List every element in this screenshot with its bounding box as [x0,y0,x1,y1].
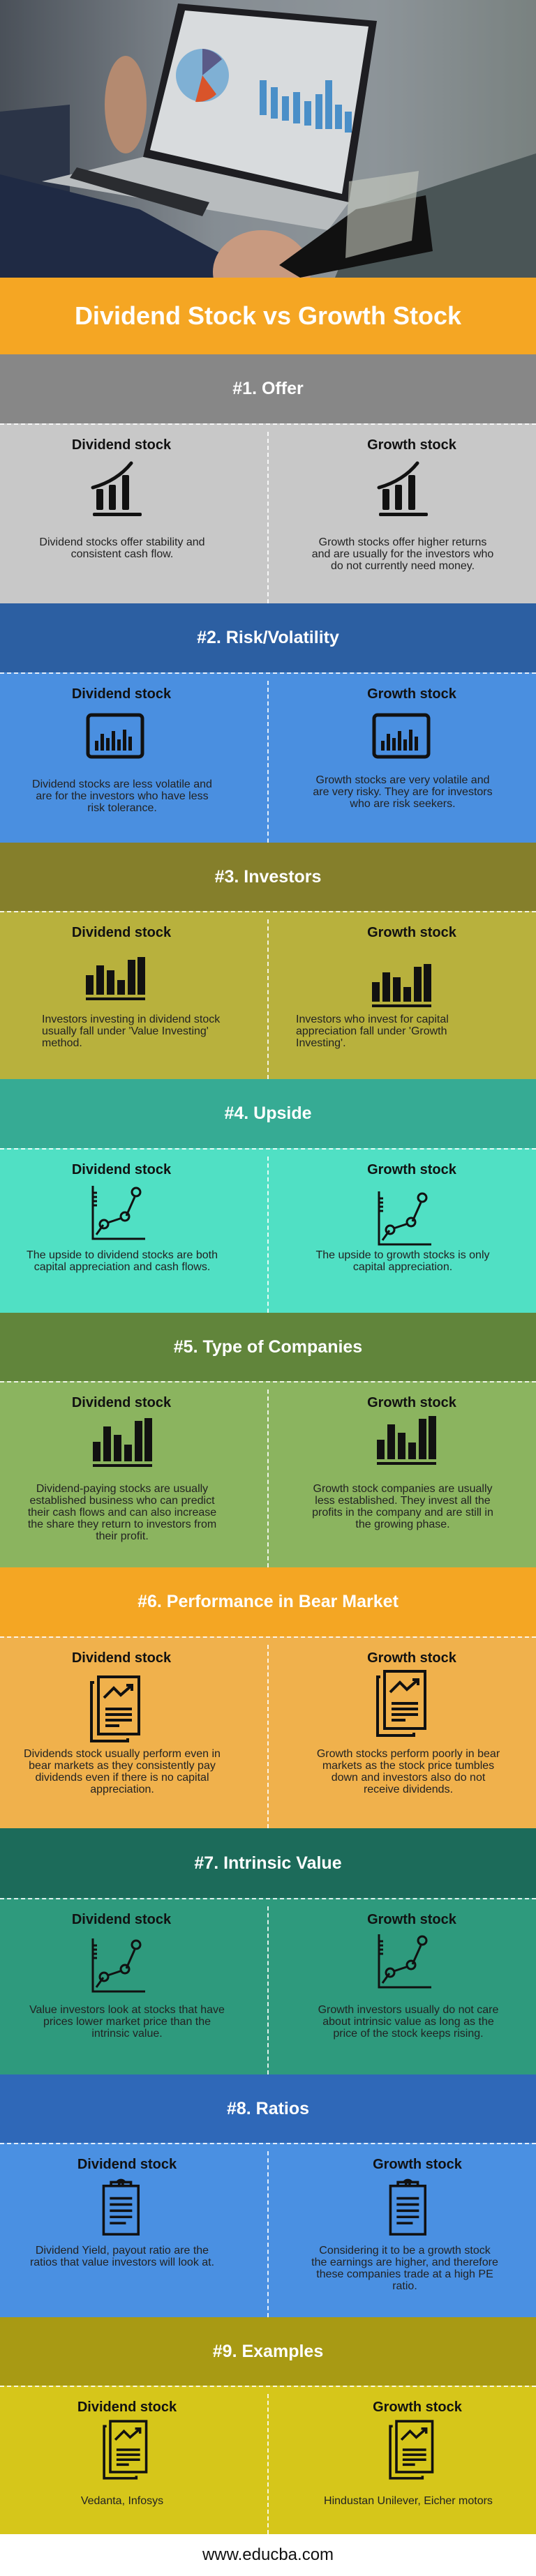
label: growth: Growth stock [367,437,456,453]
text right [312,536,493,572]
text right [311,2245,498,2292]
section 9 header [0,2317,536,2386]
text left: capital appreciation and cash flows. [34,1261,210,1273]
icon: line chart right [378,1934,431,1988]
section 9 content [0,2386,536,2534]
icon: bars left [93,1418,152,1467]
text right: are very risky. They are for investors [313,786,493,798]
text right [315,1249,490,1273]
icon: report right [376,1670,426,1737]
text left [42,1014,221,1049]
label: dividend: Dividend stock [72,1162,171,1177]
label: growth: Growth stock [367,686,456,702]
text right: appreciation fall under 'Growth [296,1025,447,1037]
section 8 header [0,2074,536,2143]
text left: risk tolerance. [87,802,157,814]
section 1 header [0,354,536,423]
icon: clipboard left [102,2179,140,2236]
section 4 header: #4. Upside [224,1104,312,1123]
section 2 header: #2. Risk/Volatility [197,628,339,647]
footer url: www.educba.com [202,2545,334,2564]
icon: bars left [86,957,145,1000]
icon: bar growth left [91,462,142,516]
text left: usually fall under 'Value Investing' [42,1025,209,1037]
section 7 content [0,1898,536,2074]
text right: Growth stocks are very volatile and [315,774,490,786]
text right [313,774,493,810]
label: growth: Growth stock [367,1162,456,1177]
title [0,278,536,354]
section 9 header: #9. Examples [213,2341,323,2360]
text left: are for the investors who have less [36,790,209,802]
label: dividend: Dividend stock [72,925,171,940]
section 4 content [0,1148,536,1313]
icon: report left [103,2420,148,2480]
text left: their profit. [96,1530,149,1542]
text right: these companies trade at a high PE [316,2268,493,2280]
text right: profits in the company and are still in [312,1507,493,1519]
text right: Hindustan Unilever, Eicher motors [324,2495,493,2507]
text right [317,1748,500,1795]
text left [24,1748,221,1795]
text left: Dividends stock usually perform even in [24,1748,221,1760]
label: dividend: Dividend stock [72,686,171,702]
text right: Investors who invest for capital [296,1014,449,1025]
text right: ratio. [392,2280,417,2292]
text right: The upside to growth stocks is only [315,1249,490,1261]
text left [29,2004,225,2040]
text right: Growth investors usually do not care [318,2004,498,2016]
text right: less established. They invest all the [315,1495,491,1507]
text left [32,778,212,814]
section 3 header [0,843,536,911]
hero photo [0,0,536,278]
section 7 header: #7. Intrinsic Value [194,1853,342,1872]
section 1 header: #1. Offer [232,379,304,398]
text right: about intrinsic value as long as the [322,2016,494,2028]
label: dividend: Dividend stock [72,1395,171,1410]
section 6 header [0,1567,536,1636]
text left [27,1249,218,1273]
text left: Vedanta, Infosys [81,2495,163,2507]
label: growth: Growth stock [373,2157,462,2172]
text left: their cash flows and can also increase [28,1507,216,1519]
text right: Considering it to be a growth stock [319,2245,491,2257]
text right: capital appreciation. [353,1261,452,1273]
section 7 header [0,1828,536,1898]
label: growth: Growth stock [367,1650,456,1666]
text left: ratios that value investors will look at. [30,2257,214,2268]
label: dividend: Dividend stock [72,437,171,453]
icon: line chart left [92,1186,145,1240]
text right [318,2004,498,2040]
text left: Value investors look at stocks that have [29,2004,225,2016]
text right: Investing'. [296,1037,346,1049]
text right: down and investors also do not [332,1772,485,1784]
section 4 header [0,1079,536,1148]
section 2 content [0,672,536,843]
text right: who are risk seekers. [350,798,456,810]
text left: Dividend stocks are less volatile and [32,778,212,790]
text right: markets as the stock price tumbles [322,1760,494,1772]
icon: bars right [372,964,431,1007]
text right [312,1483,493,1530]
text left: intrinsic value. [91,2028,163,2040]
text right: Growth stocks offer higher returns [319,536,486,548]
text left [30,2245,214,2268]
text left: appreciation. [90,1784,154,1795]
icon: monitor chart left [87,713,144,759]
text left: Dividend-paying stocks are usually [36,1483,208,1495]
text left: Investors investing in dividend stock [42,1014,220,1025]
text right: do not currently need money. [331,560,475,572]
text left: established business who can predict [29,1495,215,1507]
icon: bars right [377,1416,436,1465]
label: dividend: Dividend stock [77,2157,177,2172]
text left: method. [42,1037,82,1049]
section 6 content [0,1636,536,1828]
text right: the growing phase. [355,1519,450,1530]
icon: bar growth right [377,462,428,516]
text right: price of the stock keeps rising. [333,2028,484,2040]
icon: report right [389,2420,434,2480]
icon: clipboard right [389,2179,426,2236]
section 3 content [0,911,536,1079]
text left: bear markets as they consistently pay [29,1760,216,1772]
icon: report left [90,1675,140,1742]
section 5 header [0,1313,536,1381]
text right [296,1014,449,1049]
text left: dividends even if there is no capital [35,1772,209,1784]
text right: Growth stock companies are usually [313,1483,493,1495]
label: dividend: Dividend stock [72,1650,171,1666]
text left: consistent cash flow. [71,548,173,560]
text left [39,536,205,560]
label: growth: Growth stock [373,2400,462,2415]
text left: Dividend stocks offer stability and [39,536,205,548]
section 3 header: #3. Investors [215,866,321,886]
section 1 content [0,423,536,603]
section 8 header: #8. Ratios [227,2098,309,2118]
text right: Growth stocks perform poorly in bear [317,1748,500,1760]
text right: and are usually for the investors who [312,548,493,560]
section 2 header [0,603,536,672]
text left: the share they return to investors from [28,1519,216,1530]
label: dividend: Dividend stock [72,1912,171,1927]
icon: line chart right [378,1191,431,1246]
section 5 content [0,1381,536,1567]
label: growth: Growth stock [367,925,456,940]
text right: the earnings are higher, and therefore [311,2257,498,2268]
text left: prices lower market price than the [43,2016,211,2028]
label: growth: Growth stock [367,1395,456,1410]
section 5 header: #5. Type of Companies [174,1336,362,1356]
text left: The upside to dividend stocks are both [27,1249,218,1261]
text right: receive dividends. [364,1784,453,1795]
section 6 header: #6. Performance in Bear Market [137,1592,399,1611]
icon: line chart left [92,1938,145,1992]
section 8 content [0,2143,536,2317]
title: Dividend Stock vs Growth Stock [75,301,461,330]
label: dividend: Dividend stock [77,2400,177,2415]
icon: monitor chart right [373,713,430,759]
text left [28,1483,216,1542]
text left: Dividend Yield, payout ratio are the [36,2245,209,2257]
label: growth: Growth stock [367,1912,456,1927]
